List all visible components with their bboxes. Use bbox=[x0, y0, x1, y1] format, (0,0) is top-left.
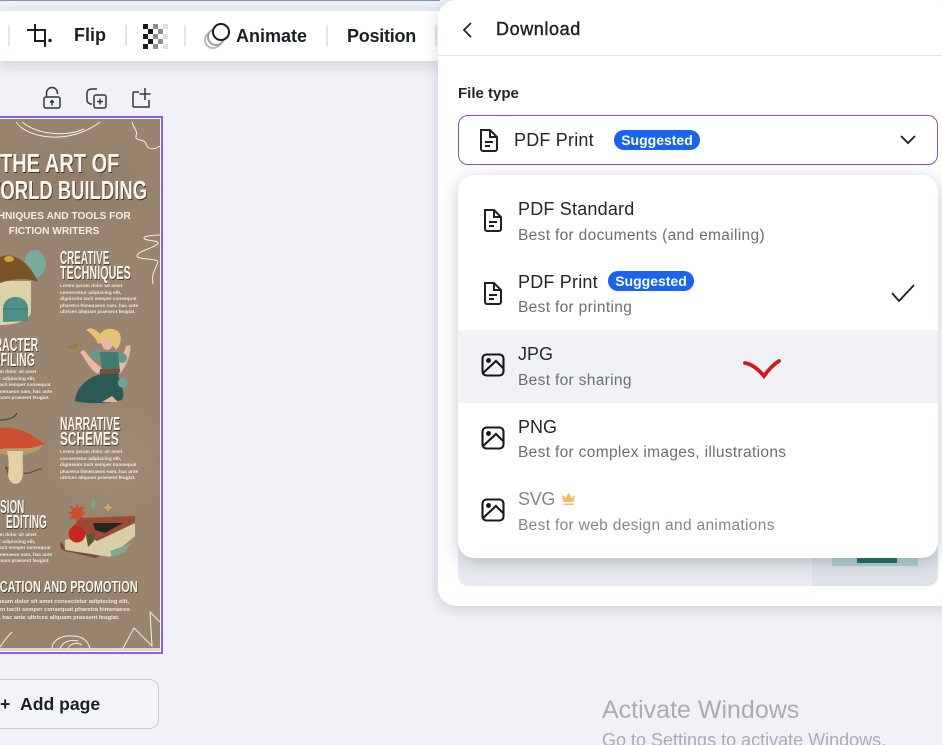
option: SVG: Best for web design and animations bbox=[518, 517, 775, 534]
badge: suggested: Suggested bbox=[615, 273, 687, 289]
option: PDF Print: Best for printing bbox=[518, 299, 632, 316]
label: Position: Position bbox=[347, 26, 416, 46]
label: file type: File type bbox=[458, 85, 519, 102]
watermark: activate windows bbox=[602, 696, 886, 745]
icon: image bbox=[481, 426, 505, 450]
section: revision and editing bbox=[0, 497, 52, 564]
badge: suggested bbox=[614, 130, 700, 150]
option: PNG: Best for complex images, illustrations bbox=[518, 444, 786, 461]
section: creative techniques: dignissim tacit semper consequat bbox=[60, 297, 137, 302]
poster selection frame bbox=[0, 116, 163, 654]
icon: image bbox=[481, 498, 505, 522]
poster texture bbox=[0, 648, 160, 651]
selected value: PDF Print bbox=[514, 130, 594, 150]
annotation: red tick bbox=[743, 359, 781, 380]
icon: document bbox=[484, 209, 502, 232]
section: revision and editing: EDITING bbox=[6, 512, 47, 532]
section: creative techniques: ultrices aliquam praesent feugiat. bbox=[60, 310, 136, 315]
icon: crown bbox=[562, 493, 575, 505]
label: add page: + Add page bbox=[0, 694, 100, 714]
option: PNG bbox=[481, 417, 786, 461]
badge: suggested: Suggested bbox=[621, 132, 693, 148]
toolbar bbox=[0, 11, 440, 61]
section: narrative schemes: NARRATIVE bbox=[60, 414, 120, 434]
hidden preview strip bbox=[458, 500, 938, 586]
add page button bbox=[0, 679, 159, 729]
panel heading: Download bbox=[496, 19, 581, 39]
back chevron bbox=[462, 22, 472, 38]
divider bbox=[438, 55, 942, 56]
section: narrative schemes bbox=[60, 414, 138, 481]
option: JPG highlighted: Best for sharing bbox=[518, 372, 632, 388]
doodle lines bbox=[0, 122, 160, 650]
label: Flip: Flip bbox=[74, 25, 106, 45]
file type dropdown bbox=[458, 115, 938, 165]
icon: image bbox=[481, 354, 505, 376]
section: publication and promotion: , hac ante ultrices aliquam praesent feugiat. bbox=[0, 615, 119, 621]
section: creative techniques: TECHNIQUES bbox=[60, 263, 131, 283]
poster subtitle: FICTION WRITERS bbox=[9, 226, 99, 237]
option: PDF Print: PDF Print bbox=[518, 272, 598, 292]
illustration: red mushroom bbox=[0, 412, 44, 484]
option: PDF Standard: PDF Standard bbox=[518, 199, 634, 219]
icon: document bbox=[484, 282, 502, 305]
illustration: mushroom house bbox=[0, 250, 46, 325]
label: Animate: Animate bbox=[236, 26, 307, 46]
dropdown menu bbox=[458, 175, 938, 558]
section: character profiling bbox=[0, 335, 52, 401]
badge: suggested bbox=[608, 271, 694, 291]
option: SVG bbox=[481, 489, 775, 534]
section: creative techniques: consectetur adipiscing elit, bbox=[60, 290, 121, 296]
icon: document bbox=[480, 129, 498, 152]
illustration: seated girl bbox=[68, 328, 130, 404]
section: narrative schemes: SCHEMES bbox=[60, 429, 119, 449]
option: PDF Standard bbox=[484, 199, 765, 244]
option: PDF Print bbox=[484, 271, 915, 316]
section: narrative schemes: Lorem ipsum dolor sit amet bbox=[60, 450, 122, 455]
illustration: book and rose bbox=[60, 498, 135, 558]
section: narrative schemes: consectetur adipiscing elit, bbox=[60, 456, 121, 462]
option: JPG highlighted: JPG bbox=[518, 344, 553, 364]
section: creative techniques bbox=[60, 248, 138, 315]
poster subtitle bbox=[0, 211, 131, 237]
chevron bbox=[900, 135, 916, 144]
preview thumbnail bbox=[812, 500, 938, 586]
section: narrative schemes: pharetra himenaeos nam, hac ante bbox=[60, 470, 138, 474]
icon: check mark bbox=[891, 284, 915, 302]
section: narrative schemes: ultrices aliquam praesent feugiat. bbox=[60, 476, 136, 481]
panel: download bbox=[438, 0, 942, 606]
option: PNG: PNG bbox=[518, 417, 557, 437]
poster bbox=[0, 119, 160, 651]
section: publication and promotion: m taciti semper consequat pharetra himenaeos bbox=[0, 607, 130, 613]
section: creative techniques: Lorem ipsum dolor sit amet bbox=[60, 284, 122, 289]
section: creative techniques: pharetra himenaeos nam, hac ante bbox=[60, 304, 138, 308]
icon: transparency checker bbox=[143, 24, 168, 49]
separator and crop icon bbox=[8, 24, 52, 47]
option: JPG highlighted bbox=[458, 330, 938, 403]
poster title: THE ART OF bbox=[0, 148, 119, 178]
top window edge bbox=[0, 0, 440, 1]
option: PDF Standard: Best for documents (and emailing) bbox=[518, 226, 765, 244]
icon: animate circles bbox=[204, 23, 230, 49]
section: creative techniques: CREATIVE bbox=[60, 248, 109, 268]
watermark: activate windows: Activate Windows bbox=[602, 696, 799, 724]
page action icons bbox=[43, 86, 150, 109]
section: publication and promotion bbox=[0, 578, 138, 621]
option: SVG: SVG bbox=[518, 489, 555, 509]
section: narrative schemes: dignissim tacit semper consequat bbox=[60, 463, 137, 468]
